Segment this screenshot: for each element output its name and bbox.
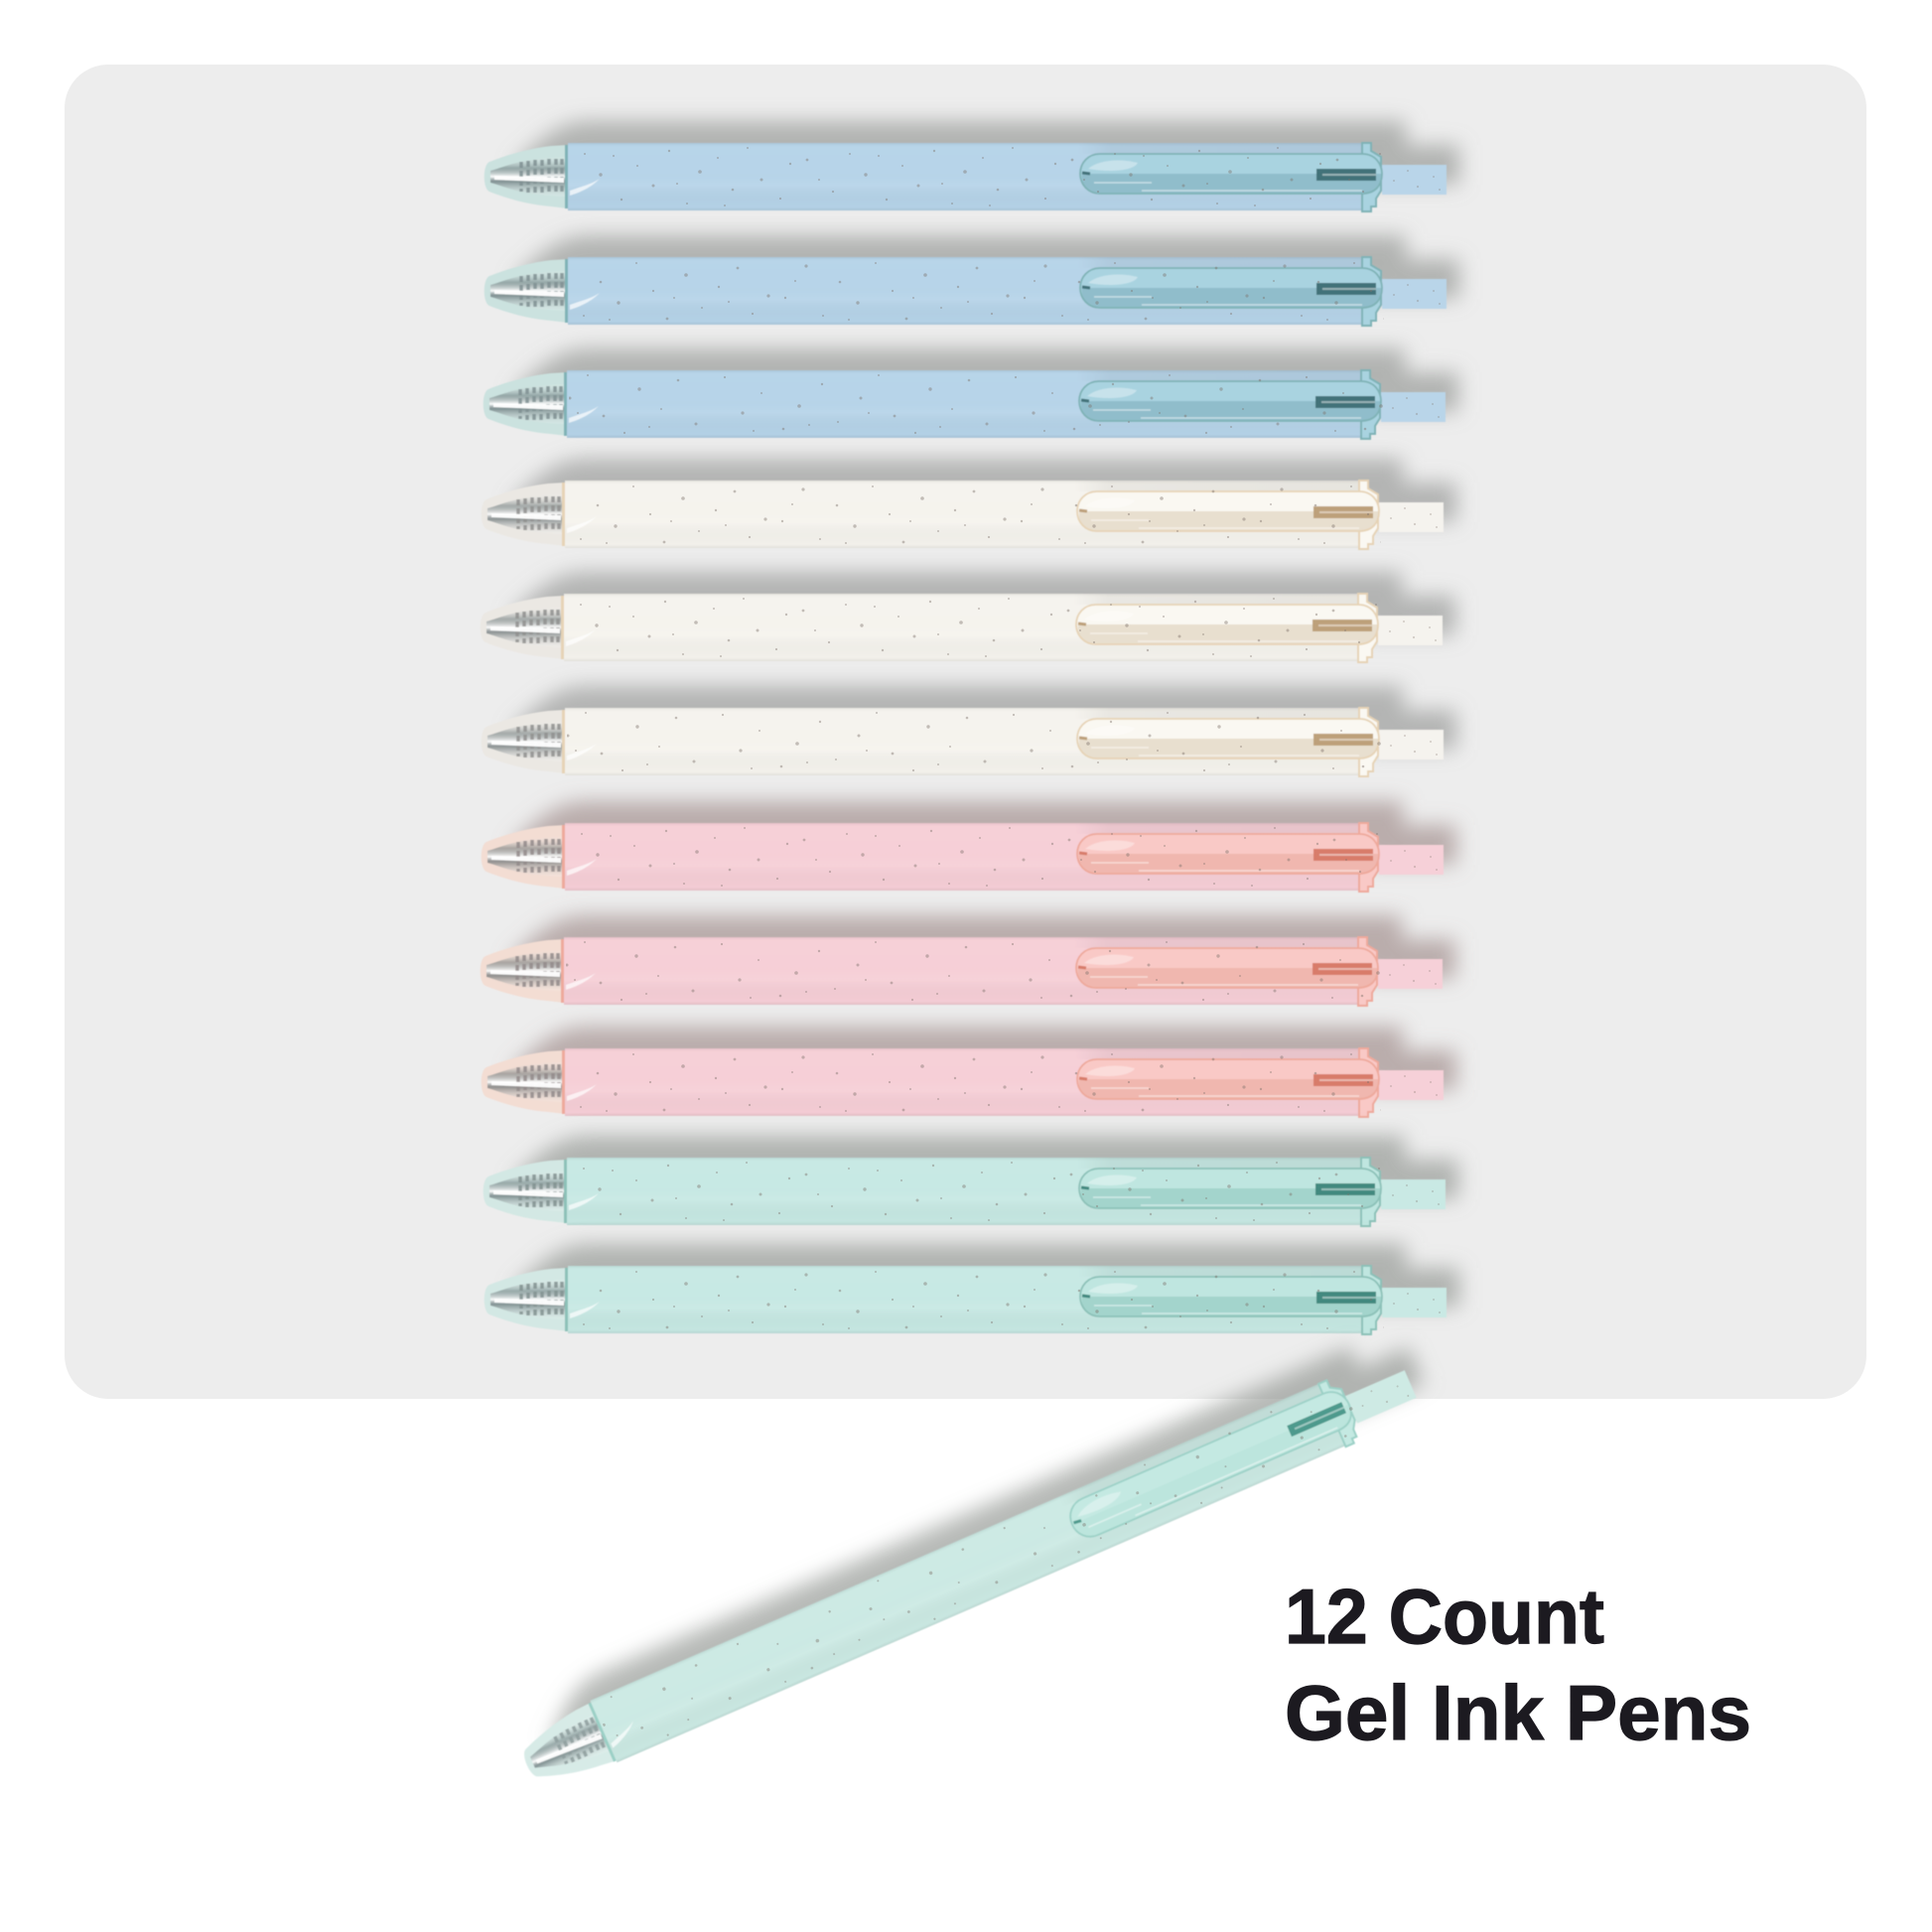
pen 2: blue xyxy=(484,235,1459,326)
pen 10: mint xyxy=(483,1136,1458,1226)
pen 5: white xyxy=(481,572,1455,662)
caption: 12 Count Gel Ink Pens xyxy=(1285,1573,1751,1756)
pen 3: blue xyxy=(483,348,1458,439)
pen 6: white xyxy=(482,686,1456,776)
caption: 12 Count Gel Ink Pens: Gel Ink Pens xyxy=(1285,1669,1751,1756)
pen shadows and pens in a row xyxy=(481,121,1459,1334)
pen 8: pink xyxy=(481,915,1455,1006)
pen 12: angled mint pen xyxy=(504,1325,1435,1797)
pen 4: white xyxy=(482,459,1456,549)
caption: 12 Count Gel Ink Pens: 12 Count xyxy=(1285,1573,1604,1660)
pen 11: mint xyxy=(484,1244,1459,1334)
pen 9: pink xyxy=(482,1027,1456,1117)
pen 7: pink xyxy=(482,801,1456,892)
background panel xyxy=(65,65,1866,1399)
pen 1: blue xyxy=(484,121,1459,211)
